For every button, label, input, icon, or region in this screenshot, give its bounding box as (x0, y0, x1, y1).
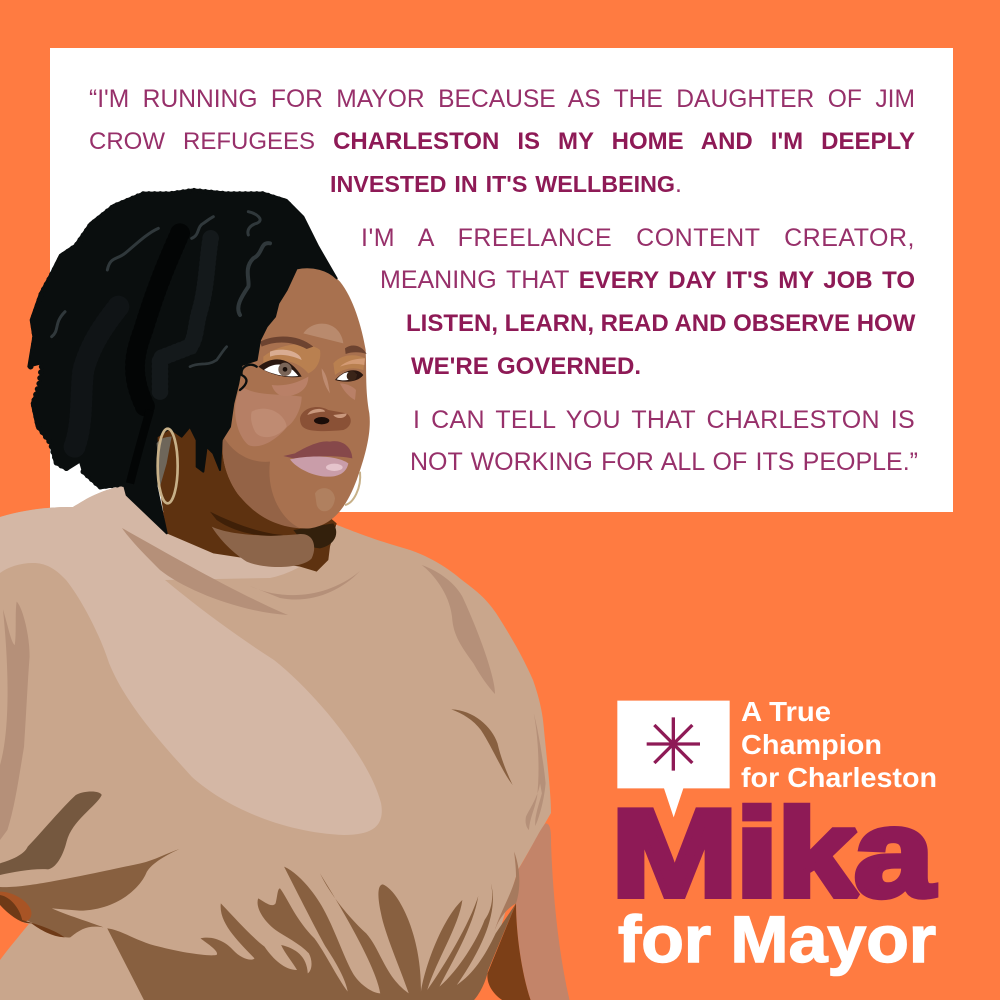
hair highlight left (74, 307, 118, 448)
earring right (345, 472, 360, 505)
quote line 3: INVESTED IN IT'S WELLBEING. (330, 170, 682, 198)
quote line 1: “I'M RUNNING FOR MAYOR BECAUSE AS THE DAUGHTER OF JIM (89, 86, 915, 113)
panel: quote (50, 48, 953, 512)
quote line 8: I CAN TELL YOU THAT CHARLESTON IS (413, 406, 915, 434)
hair curls (52, 212, 270, 390)
name: a (854, 784, 936, 923)
bottom pleats (107, 867, 516, 1000)
light patch on shoulders (0, 485, 382, 835)
speech bubble with asterisk (617, 701, 730, 817)
waist fold (0, 849, 179, 937)
arm crease (451, 709, 513, 785)
name: i (735, 784, 779, 923)
quote line 4: I'M A FREELANCE CONTENT CREATOR, (361, 224, 915, 252)
quote line 5: MEANING THAT EVERY DAY IT'S MY JOB TO (380, 266, 915, 294)
sleeve seam (494, 852, 519, 933)
earring left (157, 429, 178, 503)
name (611, 784, 936, 923)
under-eye highlight (272, 377, 308, 396)
shirt (0, 485, 570, 1000)
face (222, 267, 370, 528)
left eye (258, 359, 302, 377)
eyelid highlight (270, 350, 302, 360)
tagline: for Charleston (741, 762, 937, 793)
left orange wedge (0, 905, 29, 960)
tagline: Champion (741, 729, 882, 760)
quote line 7: WE'RE GOVERNED. (411, 353, 641, 380)
right shoulder fold (422, 565, 495, 694)
for Mayor: for Mayor (618, 902, 936, 976)
name: M (611, 784, 738, 923)
hair shadow band (135, 233, 180, 410)
shirt base (0, 485, 551, 1000)
right edge fold (526, 713, 546, 830)
forehead highlight (303, 324, 343, 343)
illustration: portrait of Mika (0, 189, 570, 1000)
tagline: A True (741, 696, 831, 727)
name: k (777, 784, 858, 923)
left sleeve fold (0, 602, 30, 840)
sleeve shadow (487, 903, 531, 1000)
neck (153, 403, 337, 572)
nose (300, 368, 351, 431)
dark fold (0, 791, 102, 875)
neck shadow (210, 512, 283, 536)
eyebrows (260, 336, 313, 349)
eye socket shading (263, 344, 320, 373)
hair highlight centre (160, 238, 211, 393)
hair (28, 189, 337, 533)
right eye (335, 370, 363, 382)
chin highlight (315, 488, 335, 511)
translucent collar (212, 527, 314, 567)
lips (283, 441, 352, 477)
pink sleeve (516, 823, 570, 1000)
quote line 6: LISTEN, LEARN, READ AND OBSERVE HOW (406, 310, 915, 337)
left orange-brown knot (0, 892, 31, 922)
cheek highlight (235, 387, 302, 446)
quote line 2: CROW REFUGEES CHARLESTON IS MY HOME AND I'M DEEPLY (89, 128, 915, 155)
logo (611, 696, 937, 976)
jaw shadow (222, 437, 300, 528)
tagline (741, 696, 937, 793)
quote line 9: NOT WORKING FOR ALL OF ITS PEOPLE.” (410, 448, 918, 476)
chest folds (122, 528, 288, 615)
choker shadow (293, 523, 336, 548)
